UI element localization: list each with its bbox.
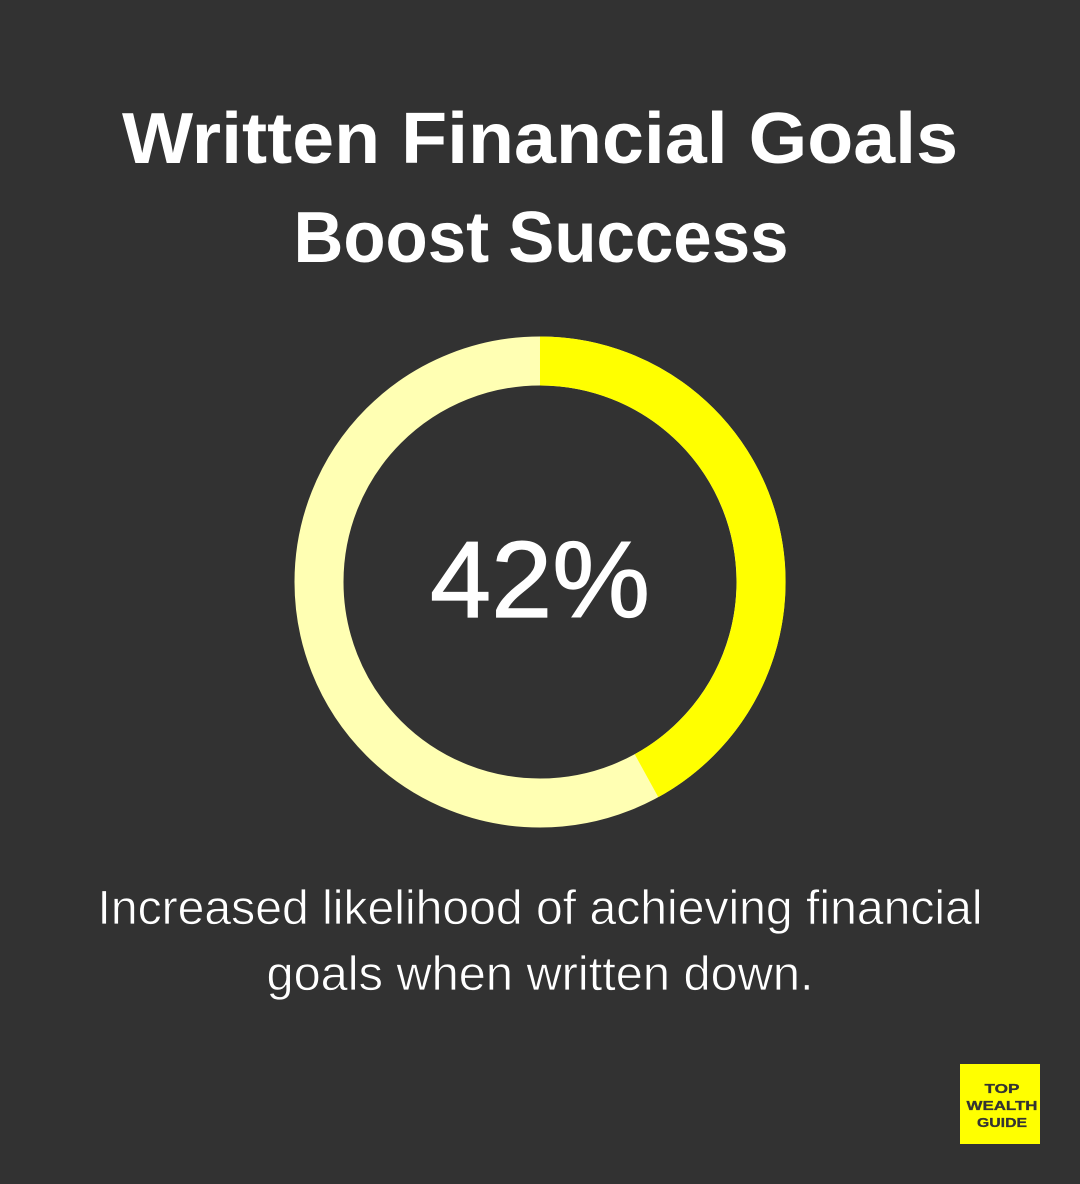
- ring highlighted arc: [540, 361, 761, 776]
- description: [98, 882, 982, 1001]
- ring remainder: [319, 361, 761, 803]
- logo badge: TOP: [984, 1081, 1020, 1096]
- title: [122, 99, 958, 278]
- logo badge: [960, 1064, 1040, 1144]
- description: Increased likelihood of achieving financial: [98, 882, 982, 935]
- donut chart: 42%: [319, 361, 761, 803]
- logo badge: WEALTH: [966, 1098, 1038, 1113]
- title: Written Financial Goals: [122, 99, 958, 179]
- logo badge: GUIDE: [977, 1115, 1027, 1130]
- description: goals when written down.: [266, 948, 814, 1001]
- center value: 42%: [430, 519, 650, 641]
- title: Boost Success: [294, 198, 788, 278]
